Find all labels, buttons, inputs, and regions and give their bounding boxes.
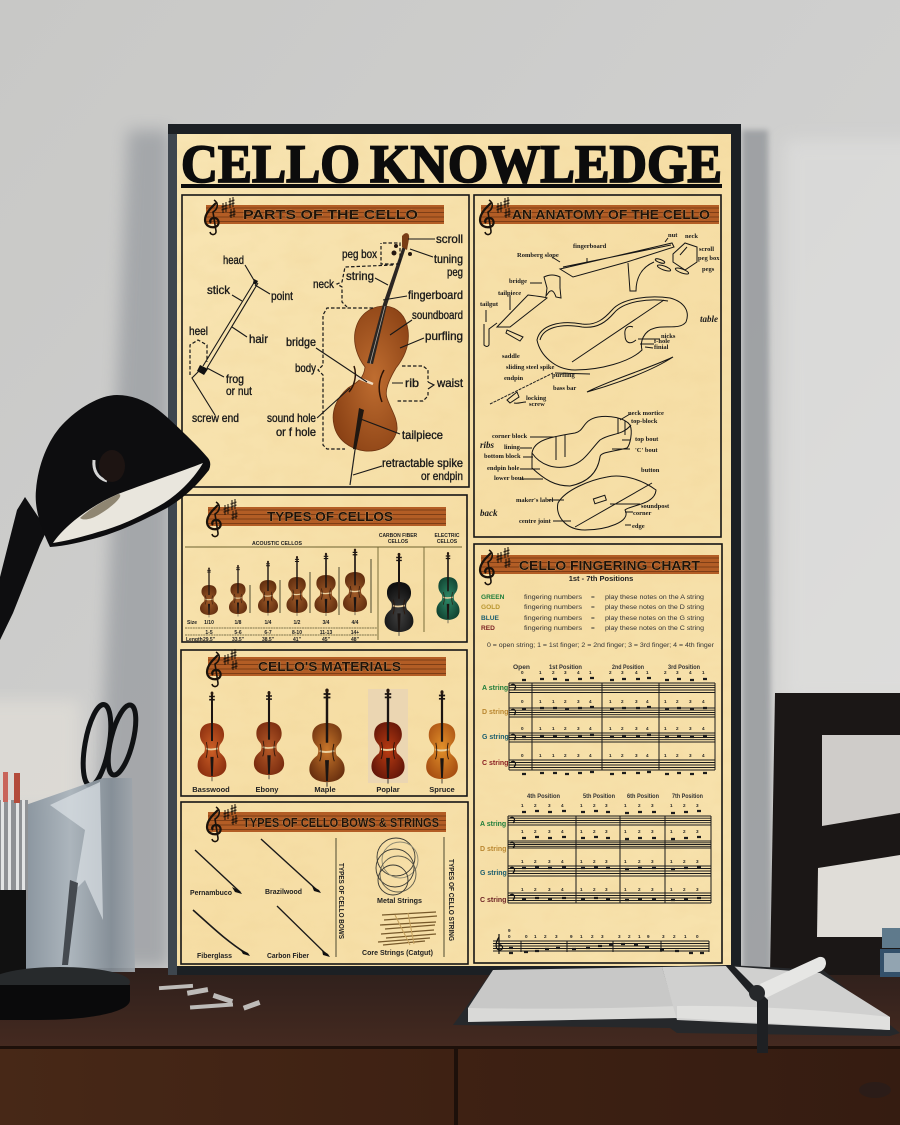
size table: 38.5" xyxy=(262,637,275,643)
white pen xyxy=(749,957,826,1001)
stacked books xyxy=(880,928,900,977)
colour legend: play these notes on the A string xyxy=(605,594,704,601)
position headers xyxy=(527,793,703,800)
anatomy labels: endpin xyxy=(504,375,524,382)
string labels: G string xyxy=(480,870,507,877)
string labels: C string xyxy=(480,897,506,904)
right pages xyxy=(662,966,890,1030)
material: maple: Maple xyxy=(314,785,336,794)
cello diagram: peg box xyxy=(342,247,377,261)
position headers: 7th Position xyxy=(672,793,703,800)
lamp shade xyxy=(36,395,210,547)
lamp arm xyxy=(0,497,47,640)
bow diagram: hair xyxy=(249,332,268,346)
string labels xyxy=(480,821,507,904)
colour legend: play these notes on the G string xyxy=(605,615,704,622)
position headers: 2nd Position xyxy=(612,664,644,671)
core strings xyxy=(362,912,437,957)
score: final scale: 321 xyxy=(618,934,641,939)
size table: 4/4 xyxy=(352,620,359,626)
neck and fingerboard drawing xyxy=(552,238,697,291)
notebook cover xyxy=(453,965,900,1036)
bow: carbon fiber xyxy=(267,906,330,960)
ribs drawing xyxy=(520,414,631,486)
colour legend: = xyxy=(591,594,595,601)
bow diagram: or nut xyxy=(226,384,253,398)
finger digits: 01234123412341 xyxy=(521,670,705,675)
score: final scale: 3210 xyxy=(662,934,699,939)
anatomy labels: finial xyxy=(654,344,669,351)
size table: 1-5 xyxy=(205,630,213,636)
heading: parts of the cello: PARTS OF THE CELLO xyxy=(243,208,418,222)
cello diagram: soundboard xyxy=(412,308,463,322)
anatomy labels: 'C' bout xyxy=(635,447,658,454)
subtitle: 1st - 7th Positions xyxy=(569,574,633,583)
bow: pernambuco: Pernambuco xyxy=(190,888,232,897)
notebook with pen xyxy=(453,957,900,1053)
table drawing xyxy=(490,297,687,404)
anatomy labels: corner block xyxy=(492,433,527,440)
heading: cello's materials: CELLO'S MATERIALS xyxy=(258,660,401,674)
core strings: Core Strings (Catgut) xyxy=(362,948,433,957)
bow: pernambuco xyxy=(190,850,242,897)
anatomy labels: centre joint xyxy=(519,518,552,525)
cello diagram: retractable spike xyxy=(382,456,463,470)
paper clips xyxy=(159,984,260,1011)
cello diagram: waist xyxy=(436,376,464,390)
electric cello xyxy=(436,552,460,623)
anatomy labels: nicks xyxy=(661,333,676,340)
score: final scale: 9 xyxy=(647,934,650,939)
poster paper xyxy=(177,134,731,966)
colour legend: BLUE xyxy=(481,615,500,622)
cello diagram: purfling xyxy=(425,329,463,343)
finger digits: 1234123123123 xyxy=(521,859,699,864)
anatomy labels: back xyxy=(480,508,498,518)
anatomy labels: endpin hole xyxy=(487,465,519,472)
finger key: 0 = open string; 1 = 1st finger; 2 = 2nd finger; 3 = 3rd finger; 4 = 4th finger xyxy=(487,642,715,649)
anatomy labels: ribs xyxy=(480,440,495,450)
black picture frame, right xyxy=(770,693,900,975)
finger digits: 1234123123123 xyxy=(521,803,699,808)
bow: fiberglass: Fiberglass xyxy=(197,951,232,960)
size table: 45" xyxy=(322,637,331,643)
staves xyxy=(508,811,711,903)
position headers: 1st Position xyxy=(549,664,582,671)
cello diagram: string xyxy=(346,269,374,283)
material: basswood xyxy=(192,691,230,794)
finger digits xyxy=(521,670,705,758)
colour legend: GOLD xyxy=(481,604,500,611)
heading: an anatomy of the cello xyxy=(480,197,719,235)
position headers: 5th Position xyxy=(583,793,615,800)
carbon fiber cello xyxy=(385,553,413,636)
anatomy labels: purfling xyxy=(552,372,576,379)
colour legend: GREEN xyxy=(481,594,505,601)
cello diagram: scroll xyxy=(436,232,463,246)
bow: brazilwood xyxy=(261,839,321,896)
poster frame xyxy=(168,124,741,975)
anatomy labels: locking xyxy=(526,395,547,402)
string labels xyxy=(482,685,509,767)
size table xyxy=(185,620,377,643)
bridge and tailpiece drawing xyxy=(484,275,561,346)
bow diagram: heel xyxy=(189,324,208,338)
size table: 1/10 xyxy=(204,620,214,626)
title: KNOWLEDGE xyxy=(370,134,722,194)
finger digits: 1234123123123 xyxy=(521,887,699,892)
string labels: A string xyxy=(482,685,508,692)
size table: 1/8 xyxy=(235,620,242,626)
colour legend: = xyxy=(591,615,595,622)
anatomy labels: tailpiece xyxy=(498,290,521,297)
anatomy labels: lining xyxy=(504,444,521,451)
cello diagram: body xyxy=(295,361,316,375)
cello diagram: tailpiece xyxy=(402,428,443,442)
anatomy labels: edge xyxy=(632,523,645,530)
vertical label: bows xyxy=(336,838,346,957)
anatomy labels: bass bar xyxy=(553,385,576,392)
heading: cello fingering chart xyxy=(480,547,719,585)
colour legend: fingering numbers xyxy=(524,615,582,622)
finger digits: 1234123123123 xyxy=(521,829,699,834)
cello diagram: neck xyxy=(313,277,335,291)
anatomy labels: peg box xyxy=(698,255,720,262)
finger digits: 01123412341234 xyxy=(521,753,705,758)
cello diagram: sound hole xyxy=(267,411,316,425)
heading: types of cellos: TYPES OF CELLOS xyxy=(267,510,393,524)
vertical label: strings: TYPES OF CELLO STRING xyxy=(447,859,456,941)
desk lamp xyxy=(0,395,210,640)
score: open to 3rd position xyxy=(482,664,715,774)
column headers: ELECTRIC xyxy=(434,533,460,539)
cello diagram: tuning xyxy=(434,252,463,266)
column headers: CELLOS xyxy=(437,539,458,545)
anatomy labels xyxy=(480,232,720,530)
material: spruce: Spruce xyxy=(429,785,455,794)
anatomy labels: screw xyxy=(529,401,545,408)
heading: types of cello bows and strings xyxy=(207,804,446,842)
bow diagram: head xyxy=(223,253,244,267)
material: poplar: Poplar xyxy=(376,785,400,794)
heading: types of cello bows and strings: TYPES OF CELLO BOWS & STRINGS xyxy=(243,816,439,830)
column headers: CARBON FIBER xyxy=(379,533,418,539)
finger digits: 01123412341234 xyxy=(521,699,705,704)
staves xyxy=(509,678,715,774)
heading: cello fingering chart: CELLO FINGERING CHART xyxy=(519,559,700,573)
position headers: Open xyxy=(513,664,530,671)
bow: brazilwood: Brazilwood xyxy=(265,887,302,896)
left pages xyxy=(468,967,677,1022)
back drawing xyxy=(548,476,656,530)
string labels: D string xyxy=(482,709,508,716)
title: CELLO xyxy=(181,134,360,194)
column headers: CELLOS xyxy=(388,539,409,545)
column headers xyxy=(185,533,462,640)
anatomy labels: tailgut xyxy=(480,301,499,308)
cello diagram: or f hole xyxy=(276,425,316,439)
metal strings: Metal Strings xyxy=(377,896,422,905)
desk xyxy=(0,968,900,1125)
column headers: ACOUSTIC CELLOS xyxy=(252,541,303,547)
base xyxy=(0,967,130,1020)
size table: Size xyxy=(187,620,197,626)
cello illustration xyxy=(333,233,412,485)
pens xyxy=(0,772,28,975)
anatomy labels: pegs xyxy=(702,266,715,273)
anatomy labels: soundpost xyxy=(641,503,670,510)
anatomy labels: neck mortice xyxy=(628,410,664,417)
colour legend: RED xyxy=(481,625,495,632)
anatomy labels: button xyxy=(641,467,660,474)
score: final scale: 9123 xyxy=(570,934,604,939)
finger digits: 01123412341234 xyxy=(521,726,705,731)
string labels: C string xyxy=(482,760,508,767)
anatomy labels: f-hole xyxy=(654,338,670,345)
score: final scale xyxy=(493,928,709,954)
colour legend: fingering numbers xyxy=(524,594,582,601)
score: final scale: 9 xyxy=(508,928,511,933)
position headers: 3rd Position xyxy=(668,664,700,671)
anatomy labels: lower bout xyxy=(494,475,525,482)
size table: 11-13 xyxy=(320,630,332,636)
size table: 1/2 xyxy=(294,620,301,626)
anatomy labels: table xyxy=(700,314,718,324)
heading: cello's materials xyxy=(207,649,446,687)
icon: scissors xyxy=(78,702,141,787)
colour legend: play these notes on the D string xyxy=(605,604,704,611)
panel: anatomy of the cello xyxy=(474,195,721,537)
size table: 8-10 xyxy=(292,630,302,636)
anatomy labels: top bout xyxy=(635,436,659,443)
title xyxy=(181,134,722,194)
position headers: 4th Position xyxy=(527,793,560,800)
position headers xyxy=(513,664,700,671)
cello diagram: rib xyxy=(405,376,419,390)
panel: parts of the cello xyxy=(182,195,469,487)
size table: 48" xyxy=(351,637,360,643)
bow diagram: screw end xyxy=(192,411,239,425)
material: maple xyxy=(309,688,345,794)
colour legend: = xyxy=(591,604,595,611)
position headers: 6th Position xyxy=(627,793,659,800)
anatomy labels: sliding steel spike xyxy=(506,364,555,371)
anatomy labels: scroll xyxy=(699,246,714,253)
vertical label: strings xyxy=(444,837,456,957)
colour legend xyxy=(481,594,704,632)
bow diagram: point xyxy=(271,289,294,303)
material: basswood: Basswood xyxy=(192,785,230,794)
anatomy labels: top-block xyxy=(631,418,658,425)
cello diagram: bridge xyxy=(286,335,316,349)
finger digits xyxy=(521,803,699,892)
panel: types of cellos xyxy=(182,495,467,643)
string labels: A string xyxy=(480,821,506,828)
heading: an anatomy of the cello: AN ANATOMY OF THE CELLO xyxy=(512,208,710,222)
cello diagram: fingerboard xyxy=(408,288,463,302)
anatomy labels: corner xyxy=(633,510,652,517)
heading: parts of the cello xyxy=(205,197,444,235)
cello diagram xyxy=(267,232,464,485)
colour legend: play these notes on the C string xyxy=(605,625,704,632)
size table: 14+ xyxy=(351,630,359,636)
poster xyxy=(168,124,741,975)
size table: 41" xyxy=(293,637,302,643)
bow diagram xyxy=(189,253,294,425)
colour legend: = xyxy=(591,625,595,632)
score: 4th to 7th position xyxy=(480,793,711,904)
cello diagram: or endpin xyxy=(421,469,463,483)
size table: 29.5" xyxy=(203,637,216,643)
colour legend: fingering numbers xyxy=(524,604,582,611)
heading: types of cellos xyxy=(207,499,446,537)
anatomy labels: saddle xyxy=(502,353,520,360)
bow diagram: frog xyxy=(226,372,244,386)
material: poplar xyxy=(368,689,408,794)
acoustic cellos by size xyxy=(200,549,371,617)
anatomy labels: bottom block xyxy=(484,453,521,460)
panel: bows and strings xyxy=(181,802,468,964)
size table: 5-6 xyxy=(234,630,242,636)
anatomy labels: Romberg slope xyxy=(517,252,559,259)
anatomy labels: bridge xyxy=(509,278,527,285)
colour legend: fingering numbers xyxy=(524,625,582,632)
material: ebony: Ebony xyxy=(256,785,279,794)
size table: 3/4 xyxy=(323,620,330,626)
elastic strap xyxy=(725,965,768,1053)
bow diagram: stick xyxy=(207,283,231,297)
material: spruce xyxy=(426,690,458,794)
bow: fiberglass xyxy=(193,910,250,960)
size table: 6-7 xyxy=(264,630,272,636)
anatomy labels: fingerboard xyxy=(573,243,607,250)
size table: 1/4 xyxy=(265,620,272,626)
string labels: D string xyxy=(480,846,506,853)
string labels: G string xyxy=(482,734,509,741)
bow: carbon fiber: Carbon Fiber xyxy=(267,951,309,960)
metal strings xyxy=(376,838,422,905)
anatomy labels: maker's label xyxy=(516,497,554,504)
size table: 33.5" xyxy=(232,637,245,643)
panel: fingering chart xyxy=(474,544,722,963)
pen holder with scissors xyxy=(0,702,141,1020)
score: final scale: 00123 xyxy=(508,934,558,939)
panel: cello's materials xyxy=(181,649,467,796)
vertical label: bows: TYPES OF CELLO BOWS xyxy=(337,863,346,939)
material: ebony xyxy=(254,691,284,794)
anatomy labels: nut xyxy=(668,232,678,239)
cello diagram: peg xyxy=(447,265,463,279)
anatomy labels: neck xyxy=(685,233,698,240)
size table: Length xyxy=(186,637,203,643)
